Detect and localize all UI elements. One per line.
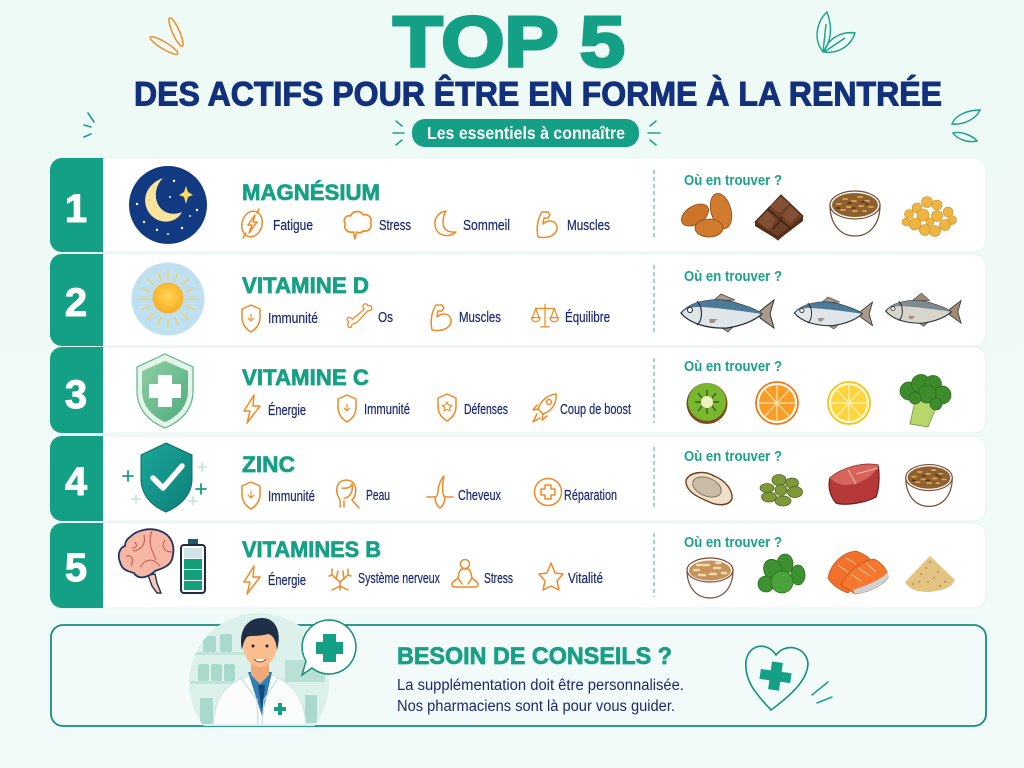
food: pumpkin seeds	[760, 474, 802, 506]
food: almonds	[678, 191, 735, 237]
panel: row 5 vitamines B	[50, 523, 986, 608]
divider	[653, 265, 655, 334]
divider	[653, 533, 655, 597]
benefit: équilibre: Équilibre	[565, 309, 610, 326]
panel: row 1 magnésium	[50, 158, 986, 252]
number badge 2	[50, 254, 103, 346]
heading: ZINC	[242, 452, 295, 477]
icon: brain	[119, 529, 173, 593]
benefit: coup de boost: Coup de boost	[560, 402, 631, 418]
heading: VITAMINES B	[242, 537, 381, 562]
icon: shield with cross	[137, 354, 193, 428]
badge: les essentiels: Les essentiels à connaître	[427, 123, 625, 143]
benefit: muscles: Muscles	[567, 218, 610, 234]
benefit: os	[347, 304, 393, 327]
heading: VITAMINE C	[242, 365, 369, 390]
benefit: stress: Stress	[484, 571, 513, 587]
benefit: peau	[337, 480, 390, 508]
benefit: immunité: Immunité	[268, 311, 318, 327]
label: où en trouver: Où en trouver ?	[684, 269, 782, 285]
heading: MAGNÉSIUM	[242, 180, 380, 205]
decoration: left sparks	[84, 113, 94, 137]
benefit: muscles	[537, 212, 610, 238]
subtitle: DES ACTIFS POUR ÊTRE EN FORME À LA RENTRÉE	[134, 76, 942, 114]
text block: Nos pharmaciens sont là pour vous guider.	[397, 698, 675, 715]
icon: heart with cross	[746, 646, 808, 710]
food: fish 3	[886, 293, 961, 326]
food: powder	[905, 556, 955, 592]
panel: conseils	[50, 613, 987, 727]
heading: BESOIN DE CONSEILS ?	[397, 643, 672, 670]
benefit: immunité	[338, 395, 410, 422]
pharmacist	[189, 613, 329, 726]
food: lemon	[828, 382, 870, 424]
benefit: vitalité	[539, 563, 603, 590]
label: où en trouver: Où en trouver ?	[684, 449, 782, 465]
number badge 4: 4	[65, 460, 88, 504]
divider	[653, 170, 655, 240]
benefit: immunité: Immunité	[364, 402, 410, 418]
benefit: énergie: Énergie	[268, 572, 306, 589]
benefit: stress: Stress	[379, 218, 411, 234]
benefit: cheveux: Cheveux	[458, 488, 502, 504]
food: broccoli	[900, 374, 951, 427]
benefit: peau: Peau	[366, 488, 390, 504]
decoration: heart sparks	[812, 682, 832, 703]
text block: La supplémentation doit être personnalisée.	[397, 677, 684, 694]
decoration: orange leaves	[148, 16, 186, 57]
benefit: système nerveux: Système nerveux	[358, 571, 441, 587]
benefit: réparation: Réparation	[564, 488, 617, 504]
number badge 1: 1	[65, 187, 87, 231]
head	[243, 623, 277, 667]
benefit: sommeil: Sommeil	[463, 218, 510, 234]
heading: VITAMINE D	[242, 273, 369, 298]
coat and shirt	[213, 670, 306, 725]
food: bowl of cereals	[687, 558, 733, 598]
food: kiwi	[686, 383, 728, 424]
food: salmon	[828, 551, 888, 594]
food: bowl of grains	[830, 191, 880, 236]
benefit: équilibre	[532, 304, 610, 327]
panel: row 3 vitamine C	[50, 347, 986, 433]
badge cross	[274, 703, 286, 715]
label: où en trouver: Où en trouver ?	[684, 173, 782, 189]
benefit: réparation	[534, 478, 617, 506]
benefit: énergie	[244, 566, 306, 594]
panel: row 2 vitamine D	[50, 254, 986, 346]
food: spinach	[758, 554, 805, 593]
benefit: coup de boost	[533, 394, 631, 422]
icon: sun	[132, 262, 204, 336]
benefit: os: Os	[378, 310, 393, 326]
icon: night moon	[129, 166, 207, 244]
text block	[397, 677, 684, 715]
benefit: cheveux	[427, 476, 502, 508]
benefit: énergie	[244, 395, 306, 423]
number badge 5	[50, 523, 103, 608]
benefit: immunité: Immunité	[268, 489, 315, 505]
benefit: muscles	[431, 305, 501, 331]
number badge 1	[50, 158, 103, 252]
benefit: défenses: Défenses	[464, 402, 508, 418]
number badge 3	[50, 347, 103, 433]
icon: shield with check	[123, 443, 206, 512]
benefit: sommeil	[435, 211, 510, 236]
food: fish 1	[681, 294, 774, 332]
benefit: stress	[452, 560, 513, 587]
divider	[653, 358, 655, 423]
benefit: énergie: Énergie	[268, 402, 306, 419]
badge: les essentiels	[412, 119, 639, 147]
food: bowl of lentils	[906, 465, 952, 506]
benefit: stress	[344, 211, 411, 239]
label: où en trouver: Où en trouver ?	[684, 359, 782, 375]
panel: row 4 zinc	[50, 436, 986, 521]
number badge 4	[50, 436, 103, 521]
benefit: muscles: Muscles	[459, 310, 501, 326]
divider	[653, 447, 655, 510]
benefit: fatigue	[239, 209, 313, 239]
benefit: défenses	[438, 394, 508, 421]
label: où en trouver: Où en trouver ?	[684, 535, 782, 551]
food: fish 2	[794, 297, 872, 329]
speech bubble with cross	[302, 620, 356, 675]
benefit: immunité	[242, 305, 318, 332]
benefit: immunité	[242, 482, 315, 509]
food: red meat	[829, 464, 879, 504]
number badge 3: 3	[65, 373, 87, 417]
backdrop: pharmacy shelves	[189, 613, 329, 726]
title: TOP 5: TOP 5	[393, 4, 625, 82]
benefit: système nerveux	[329, 569, 441, 590]
icon: battery	[181, 539, 205, 593]
food: chickpeas	[902, 196, 956, 236]
number badge 5: 5	[65, 546, 87, 590]
neck	[251, 660, 269, 684]
number badge 2: 2	[65, 281, 87, 325]
benefit: fatigue: Fatigue	[273, 218, 313, 234]
food: oyster	[686, 473, 732, 505]
benefit: vitalité: Vitalité	[568, 571, 603, 587]
decoration: badge sparks	[393, 121, 660, 145]
decoration: green leaves	[817, 12, 855, 52]
food: chocolate	[755, 195, 803, 240]
decoration: right leaves	[952, 110, 980, 142]
food: orange	[756, 382, 798, 424]
